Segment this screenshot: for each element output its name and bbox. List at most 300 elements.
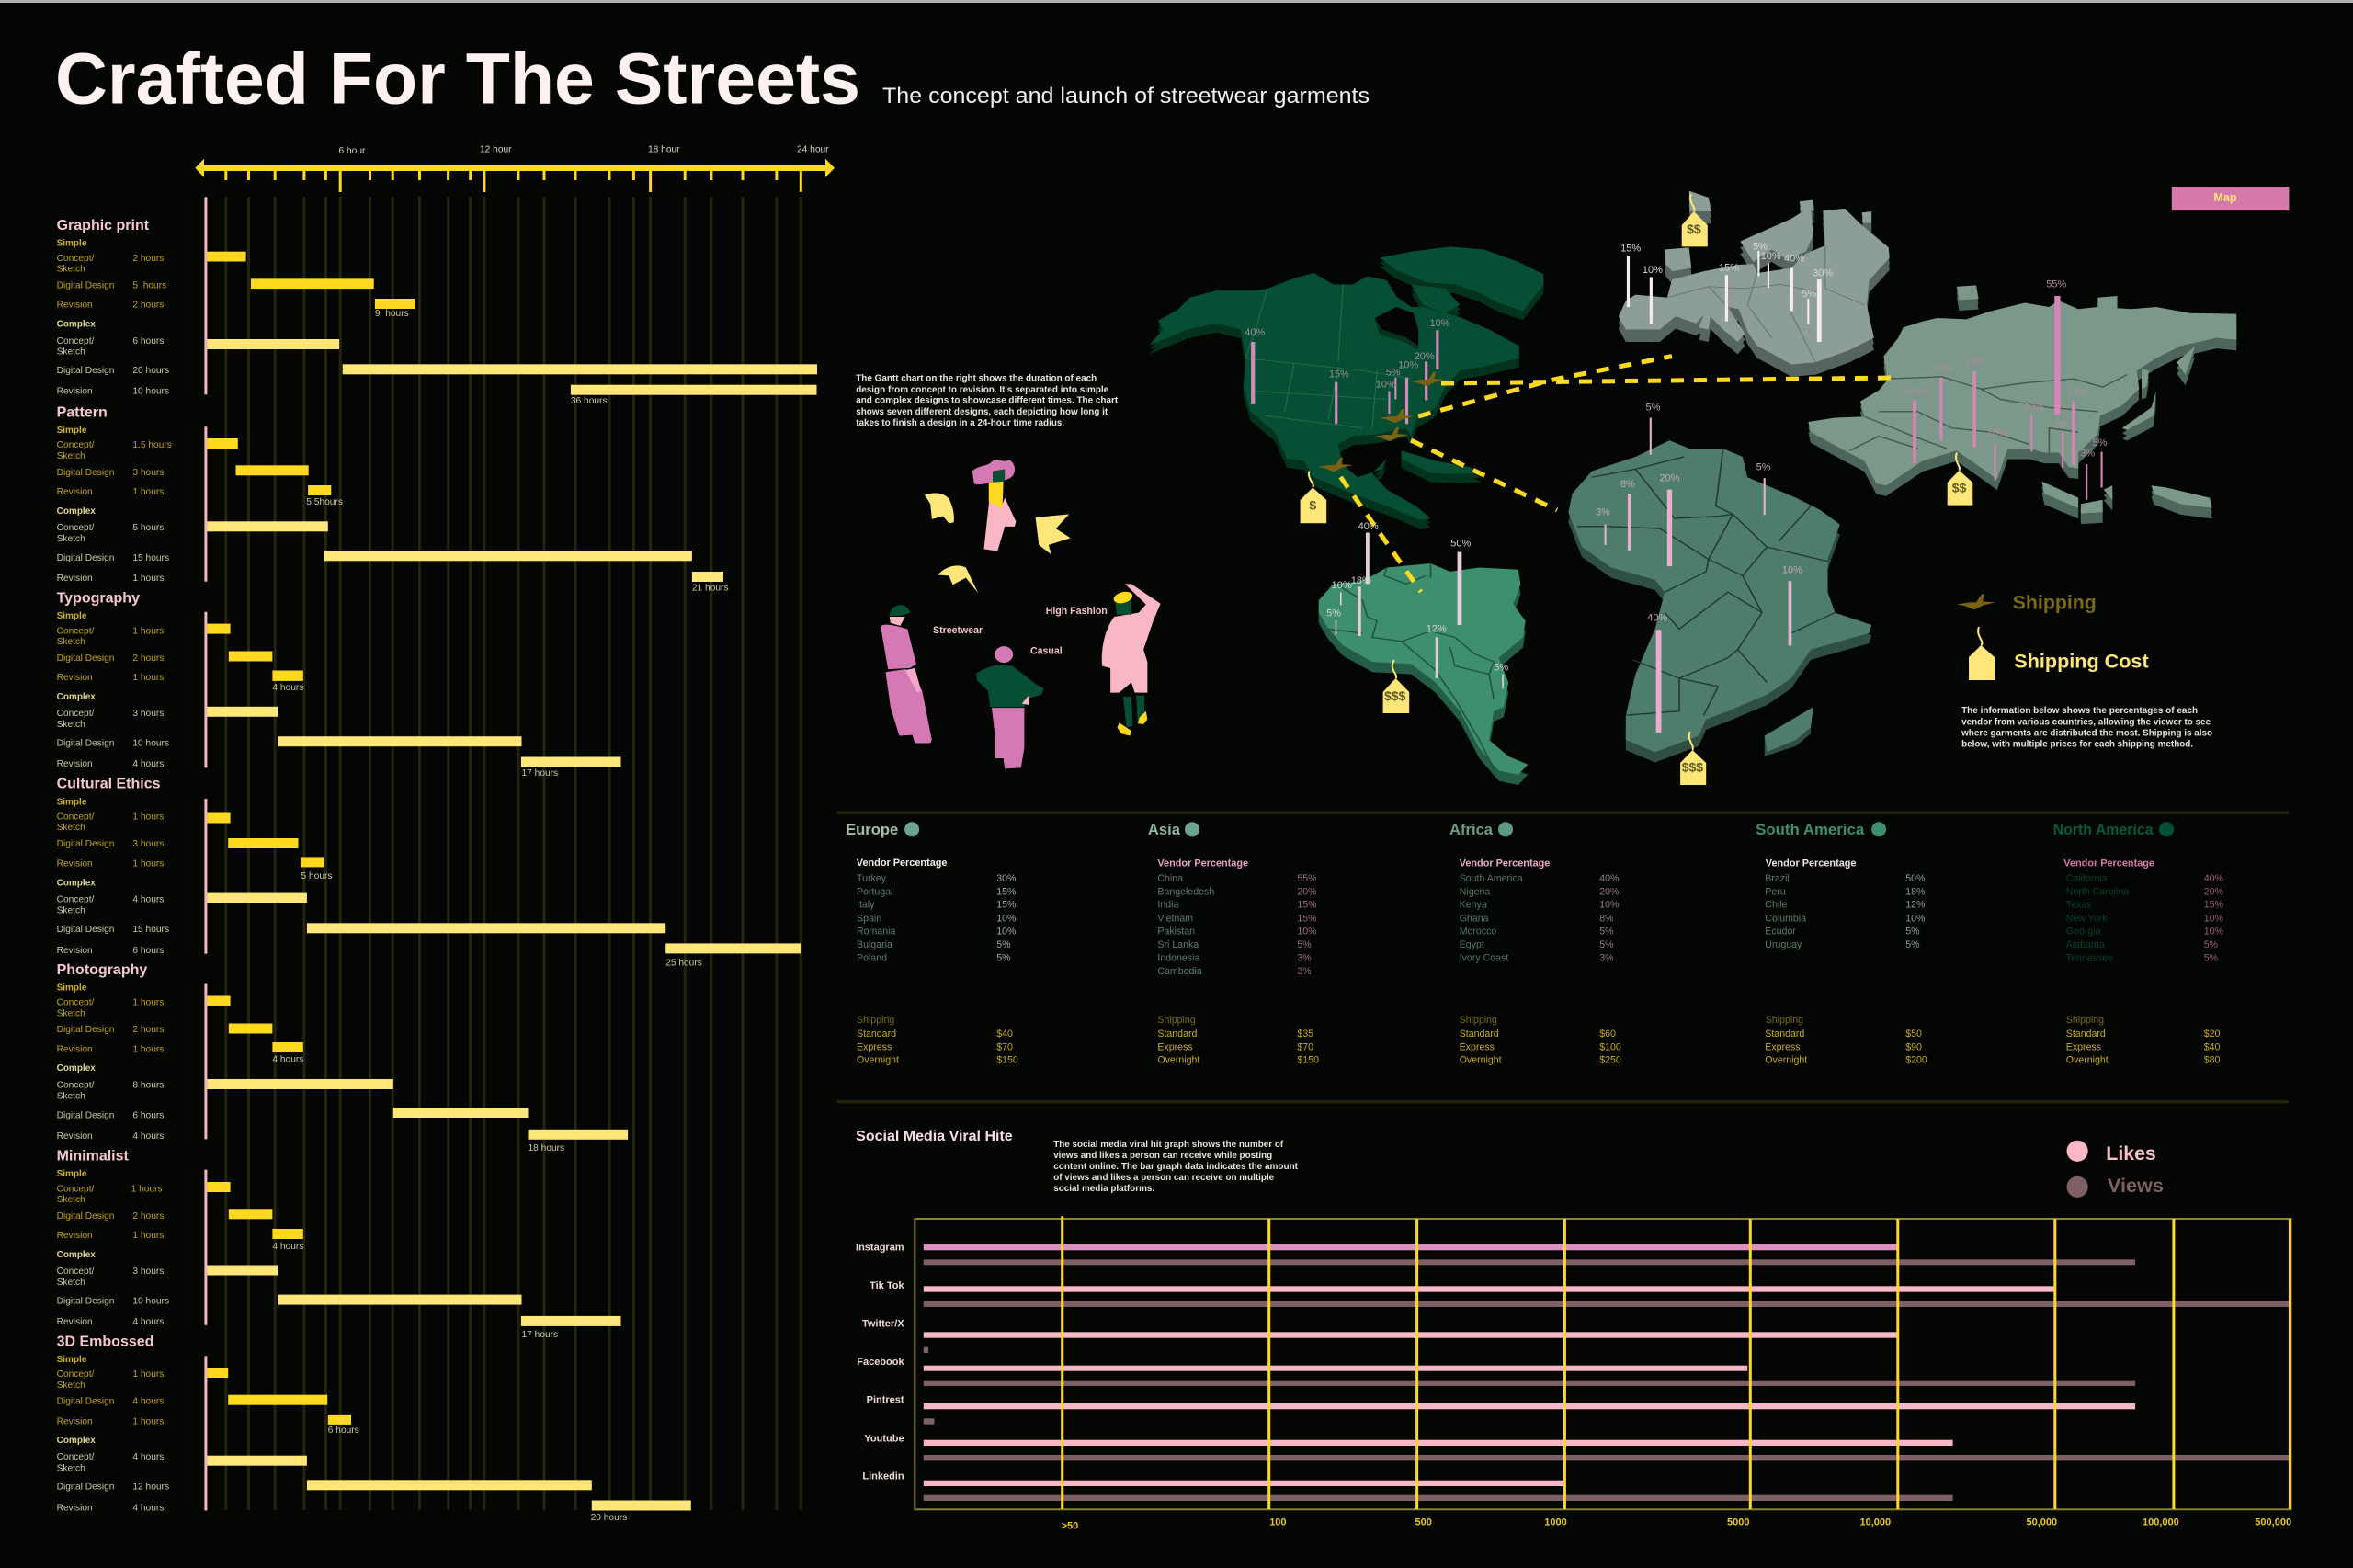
panel: Graphic print gantt: Digital Design (57, 281, 114, 290)
social media explanation text: social media platforms. (1053, 1184, 1154, 1194)
panel: Pattern gantt: 21 hours (692, 583, 729, 594)
panel: Typography gantt: Complex (57, 692, 96, 702)
social media explanation text: views and likes a person can receive while posting (1053, 1151, 1272, 1161)
panel: Photography gantt: Sketch (57, 1092, 85, 1101)
panel: Typography gantt: 1 hours (132, 673, 164, 683)
panel: Europe vendors: 10% (996, 926, 1017, 937)
panel: Pattern gantt: Digital Design (57, 553, 114, 563)
panel: Typography gantt: 1 hours (132, 626, 164, 636)
panel: South America vendors: Brazil (1765, 873, 1790, 884)
map: europe (1619, 191, 1890, 377)
panel: Europe vendors: 5% (996, 953, 1011, 964)
labels: north america percentages: 10% (1398, 359, 1418, 370)
labels: asia percentages: 40% (1987, 428, 2007, 439)
legend: shipping (1957, 591, 2097, 613)
panel: Minimalist gantt: Sketch (57, 1278, 85, 1288)
axis labels: 500 (1415, 1517, 1432, 1528)
price tag: Africa $$$ (1680, 732, 1706, 785)
panel: Cultural Ethics gantt: 6 hours (132, 946, 164, 956)
labels: asia percentages: 40% (1905, 386, 1926, 397)
section divider (837, 1100, 2289, 1103)
chart: south america vendor pins (1336, 533, 1504, 688)
panel: South America vendors: $90 (1905, 1041, 1922, 1052)
map: south america (1319, 533, 1528, 785)
price tag: Africa $$$: $$$ (1682, 759, 1703, 774)
panel: Minimalist gantt: Sketch (57, 1195, 85, 1205)
labels: asia percentages (1905, 279, 2108, 459)
panel: Asia vendors: Overnight (1157, 1055, 1199, 1066)
panel: Asia vendors: Vendor Percentage (1157, 858, 1248, 869)
panel: South America vendors: 18% (1905, 886, 1926, 897)
panel: Asia vendors: India (1157, 900, 1178, 911)
panel: South America vendors: Shipping (1766, 1015, 1803, 1026)
platform labels: Youtube (864, 1433, 904, 1444)
panel: Europe vendors: $40 (996, 1028, 1013, 1040)
labels: south america percentages: 18% (1351, 575, 1371, 586)
panel: Cultural Ethics gantt: 1 hours (132, 812, 164, 822)
panel: Cultural Ethics gantt: Concept/ (57, 894, 95, 904)
map explanation text: The information below shows the percentages of each (1961, 706, 2198, 716)
panel: Minimalist gantt: Complex (57, 1250, 96, 1260)
labels: europe percentages: 40% (1784, 253, 1804, 264)
platform labels: Pintrest (867, 1394, 904, 1405)
labels: europe percentages: 15% (1719, 263, 1739, 274)
panel: Asia vendors: 3% (1297, 966, 1312, 977)
panel: Pattern gantt: 1 hours (132, 574, 164, 584)
labels: asia percentages: 10% (1932, 363, 1952, 374)
panel: Minimalist gantt: 1 hours (132, 1231, 164, 1241)
panel: Cultural Ethics gantt: 1 hours (132, 858, 164, 869)
map explanation text: below, with multiple prices for each shipping method. (1961, 739, 2193, 750)
panel: Europe vendors: 15% (996, 900, 1017, 911)
panel: Asia vendors: 55% (1297, 873, 1317, 884)
panel: South America vendors: 10% (1905, 913, 1926, 924)
social media explanation text: The social media viral hit graph shows the number of (1053, 1140, 1284, 1150)
panel: Europe vendors: 15% (996, 886, 1017, 897)
panel: Europe vendors: Shipping (857, 1015, 894, 1026)
panel: Asia vendors: 10% (1297, 926, 1317, 937)
labels: asia percentages: 55% (2046, 279, 2067, 290)
panel: Photography gantt: 4 hours (272, 1055, 303, 1064)
platform labels: Twitter/X (862, 1318, 904, 1329)
panel: Photography gantt: 2 hours (132, 1025, 164, 1035)
map button (2172, 187, 2289, 210)
panel: Pattern gantt: 3 hours (132, 468, 164, 478)
labels: asia percentages: 3% (2053, 420, 2068, 431)
axis labels: 50,000 (2026, 1517, 2057, 1528)
panel: Typography gantt: 3 hours (132, 709, 164, 719)
map explanation text (1961, 706, 2212, 750)
labels: north america percentages: 40% (1245, 327, 1266, 338)
panel: Graphic print gantt: Simple (57, 239, 87, 248)
gantt timeline axis: 24 hour (797, 145, 829, 154)
panel: Africa vendors: 5% (1599, 939, 1614, 950)
panel: Minimalist gantt: 3 hours (132, 1267, 164, 1277)
labels: africa percentages: 40% (1647, 612, 1667, 623)
panel: South America vendors (1756, 821, 1927, 1066)
panel: Cultural Ethics gantt (57, 776, 801, 969)
panel: South America vendors: Standard (1765, 1028, 1804, 1040)
price tag: South America $$$: $$$ (1384, 688, 1406, 703)
panel: North America vendors: Shipping (2066, 1015, 2104, 1026)
panel: Cultural Ethics gantt: Sketch (57, 823, 85, 833)
panel: Europe vendors: Vendor Percentage (857, 858, 947, 869)
panel: Photography gantt: Concept/ (57, 998, 95, 1007)
panel: Africa vendors: Ivory Coast (1460, 953, 1508, 964)
panel: Pattern gantt (57, 404, 729, 594)
panel: Asia vendors: $35 (1297, 1028, 1313, 1040)
price tag: North America $ (1301, 472, 1326, 523)
panel: Africa vendors: Morocco (1460, 926, 1496, 937)
panel: Cultural Ethics gantt: 4 hours (132, 894, 164, 904)
panel: Asia vendors: Shipping (1157, 1015, 1196, 1026)
panel: Pattern gantt: 15 hours (132, 553, 169, 563)
panel: Europe vendors: Express (857, 1041, 892, 1052)
panel: Photography gantt: Simple (57, 983, 87, 993)
chart: europe vendor pins (1627, 251, 1822, 342)
price tag: Asia $$ (1948, 452, 1972, 506)
panel: 3D Embossed gantt: Digital Design (57, 1397, 114, 1407)
gantt explanation text: takes to finish a design in a 24-hour time radius. (856, 418, 1064, 428)
panel: North America vendors: 40% (2204, 873, 2223, 884)
panel: Africa vendors: South America (1460, 873, 1523, 884)
panel: Photography gantt: Complex (57, 1063, 96, 1074)
panel: North America vendors: North America (2053, 821, 2154, 838)
panel: Europe vendors (846, 821, 1018, 1066)
panel: Typography gantt: 17 hours (522, 768, 558, 778)
panel: Minimalist gantt: 1 hours (131, 1184, 163, 1194)
panel: North America vendors: North Carolina (2066, 886, 2129, 897)
panel: Cultural Ethics gantt: 3 hours (132, 839, 164, 849)
panel: Pattern gantt: Revision (57, 487, 93, 497)
panel: 3D Embossed gantt: 3D Embossed (57, 1335, 153, 1349)
gantt timeline axis (195, 145, 835, 192)
labels: asia percentages: 3% (2080, 448, 2095, 459)
panel: 3D Embossed gantt: 4 hours (132, 1397, 164, 1407)
panel: 3D Embossed gantt: 20 hours (591, 1513, 627, 1523)
panel: Asia vendors: $70 (1297, 1041, 1313, 1052)
panel: Cultural Ethics gantt: Revision (57, 858, 93, 869)
panel: Africa vendors (1449, 821, 1621, 1066)
panel: Photography gantt: Digital Design (57, 1110, 114, 1120)
panel: 3D Embossed gantt: Concept/ (57, 1452, 95, 1462)
panel: Asia vendors: 5% (1297, 939, 1312, 950)
figure: streetwear (881, 605, 932, 744)
panel: Graphic print gantt (57, 197, 817, 406)
labels: europe percentages (1620, 241, 1833, 300)
panel: North America vendors: $80 (2204, 1055, 2220, 1066)
panel: Asia vendors: Bangeledesh (1157, 886, 1214, 897)
panel: North America vendors: 15% (2204, 900, 2223, 911)
panel: Africa vendors: Standard (1460, 1028, 1499, 1040)
panel: Typography gantt: Digital Design (57, 739, 114, 748)
labels: south america percentages: 40% (1358, 521, 1379, 532)
panel: Graphic print gantt: 6 hours (132, 336, 164, 347)
labels: south america percentages: 5% (1494, 662, 1508, 673)
panel: Africa vendors: 20% (1599, 886, 1620, 897)
panel: North America vendors: Standard (2066, 1028, 2106, 1040)
panel: South America vendors: $50 (1905, 1028, 1922, 1040)
panel: Typography gantt: Simple (57, 611, 87, 621)
figure: casual (976, 646, 1044, 768)
panel: Typography gantt: Revision (57, 759, 93, 769)
platform labels: Linkedin (862, 1471, 904, 1483)
icon: yellow boomerang shard (938, 565, 978, 593)
labels: asia percentages: 20% (2023, 402, 2044, 413)
panel: South America vendors: 5% (1905, 939, 1920, 950)
platform labels (856, 1243, 904, 1483)
panel: 3D Embossed gantt: 12 hours (132, 1483, 169, 1493)
panel: North America vendors: Express (2066, 1041, 2101, 1052)
panel: Asia vendors: 15% (1297, 913, 1317, 924)
panel: North America vendors: 20% (2204, 886, 2223, 897)
bars: views (924, 1259, 2290, 1501)
section divider (837, 811, 2289, 814)
gantt timeline axis: 6 hour (338, 146, 366, 156)
panel: Typography gantt: 4 hours (272, 683, 303, 693)
panel: Europe vendors: Bulgaria (857, 939, 892, 950)
axis labels: >50 (1062, 1520, 1078, 1531)
panel: Europe vendors: Romania (857, 926, 896, 937)
panel: Europe vendors: 5% (996, 939, 1011, 950)
panel: Photography gantt: 6 hours (132, 1110, 164, 1120)
panel: Africa vendors: $250 (1599, 1055, 1621, 1066)
panel: Pattern gantt: 5 hours (132, 523, 164, 533)
panel: Typography gantt: 4 hours (132, 759, 164, 769)
gantt explanation text: and complex designs to showcase different times. The chart (856, 396, 1119, 406)
price tag: South America $$$ (1383, 660, 1409, 713)
panel: Minimalist gantt: 4 hours (132, 1317, 164, 1327)
gantt explanation text (856, 373, 1119, 428)
legend: shipping cost: Shipping Cost (2014, 649, 2149, 672)
labels: europe percentages: 15% (1620, 244, 1641, 255)
panel: Graphic print gantt: 2 hours (132, 254, 164, 264)
panel: North America vendors: 10% (2204, 913, 2223, 924)
panel: Cultural Ethics gantt: Cultural Ethics (57, 776, 161, 792)
panel: Africa vendors: Express (1460, 1041, 1495, 1052)
labels: south america percentages: 10% (1332, 580, 1352, 591)
legend: views (2066, 1175, 2164, 1198)
panel: Pattern gantt: Concept/ (57, 440, 95, 450)
panel: Pattern gantt: 5.5hours (306, 497, 343, 507)
legend: shipping cost (1969, 627, 2149, 680)
labels: europe percentages: 30% (1813, 267, 1833, 278)
panel: Typography gantt: Sketch (57, 720, 85, 730)
labels: south america percentages (1326, 521, 1508, 673)
panel: Cultural Ethics gantt: 5 hours (301, 871, 332, 881)
gantt grid lines (226, 197, 801, 1510)
panel: Pattern gantt: Sketch (57, 534, 85, 544)
legend: likes: Likes (2106, 1142, 2156, 1165)
labels: north america percentages (1245, 318, 1450, 390)
panel: Minimalist gantt: 10 hours (132, 1296, 169, 1307)
figure: photographer top (972, 460, 1016, 551)
panel: Africa vendors: Ghana (1460, 913, 1489, 924)
labels: asia percentages: 15% (2067, 386, 2087, 397)
panel: Africa vendors: Overnight (1460, 1055, 1502, 1066)
panel: Graphic print gantt: Complex (57, 320, 96, 329)
panel: North America vendors: Alabama (2066, 939, 2105, 950)
panel: Asia vendors: Asia (1148, 821, 1181, 838)
shipping routes: dashed lines (1340, 357, 1893, 592)
panel: Europe vendors: Standard (857, 1028, 896, 1040)
price tag: North America $: $ (1309, 498, 1316, 513)
panel: North America vendors: Overnight (2066, 1055, 2109, 1066)
map: asia (1808, 285, 2236, 524)
axis labels: 500,000 (2255, 1517, 2291, 1528)
panel: Asia vendors (1148, 821, 1319, 1066)
panel: Photography gantt: 1 hours (132, 998, 164, 1007)
panel: 3D Embossed gantt: Simple (57, 1355, 87, 1365)
panel: Pattern gantt: Sketch (57, 451, 85, 461)
map button: Map (2213, 191, 2237, 204)
panel: Graphic print gantt: Sketch (57, 347, 85, 357)
panel: North America vendors: $20 (2204, 1028, 2220, 1040)
platform labels: Tik Tok (870, 1280, 904, 1291)
panel: Typography gantt: Typography (57, 590, 140, 607)
panel: Europe vendors: Poland (857, 953, 887, 964)
axis labels (1062, 1517, 2291, 1531)
axis labels: 1000 (1544, 1517, 1567, 1528)
panel: Asia vendors: Indonesia (1157, 953, 1199, 964)
panel: 3D Embossed gantt: 1 hours (132, 1369, 164, 1380)
panel: Cultural Ethics gantt: 15 hours (132, 925, 169, 935)
gantt explanation text: The Gantt chart on the right shows the duration of each (856, 373, 1097, 384)
labels: africa percentages: 20% (1659, 473, 1680, 484)
panel: 3D Embossed gantt: 4 hours (132, 1503, 164, 1513)
social media explanation text: content online. The bar graph data indicates the amount (1053, 1162, 1299, 1172)
legend: shipping: Shipping (2013, 591, 2097, 613)
labels: south america percentages: 50% (1450, 539, 1472, 550)
panel: Photography gantt: Revision (57, 1044, 93, 1055)
panel: Pattern gantt: 1 hours (132, 487, 164, 497)
panel: North America vendors: $40 (2204, 1041, 2220, 1052)
panel: Graphic print gantt: Graphic print (57, 218, 150, 233)
panel: North America vendors: 5% (2204, 953, 2219, 964)
panel: Europe vendors: Spain (857, 913, 881, 924)
price tag: Asia $$: $$ (1952, 480, 1966, 494)
panel: Typography gantt (57, 590, 621, 778)
panel: Asia vendors: Vietnam (1157, 913, 1193, 924)
title: Crafted For The Streets (55, 38, 860, 119)
panel: North America vendors: Tennessee (2066, 953, 2113, 964)
legend: views: Views (2108, 1175, 2164, 1197)
panel: Typography gantt: 10 hours (132, 739, 169, 748)
panel: Europe vendors: $150 (996, 1055, 1018, 1066)
map explanation text: vendor from various countries, allowing the viewer to see (1961, 717, 2211, 727)
chart: asia vendor pins (1913, 296, 2103, 500)
labels: south america percentages: 12% (1427, 623, 1447, 634)
panel: Minimalist gantt: Concept/ (57, 1184, 95, 1194)
panel: North America vendors: Georgia (2066, 926, 2101, 937)
labels: africa percentages: 10% (1782, 564, 1802, 575)
panel: Minimalist gantt: Revision (57, 1231, 93, 1241)
panel: Africa vendors: Nigeria (1460, 886, 1490, 897)
panel: Europe vendors: Portugal (857, 886, 892, 897)
panel: North America vendors: 10% (2204, 926, 2223, 937)
panel: Minimalist gantt: Digital Design (57, 1211, 114, 1221)
panel: Pattern gantt: Complex (57, 506, 96, 517)
panel: Africa vendors: 5% (1599, 926, 1614, 937)
panel: Europe vendors: Overnight (857, 1055, 899, 1066)
panel: Cultural Ethics gantt: 25 hours (665, 958, 702, 969)
panel: 3D Embossed gantt: Revision (57, 1503, 93, 1513)
icon: yellow flag shard (1036, 514, 1071, 554)
panel: Minimalist gantt: Revision (57, 1317, 93, 1327)
social media explanation text (1053, 1140, 1299, 1194)
labels: south america percentages: 5% (1326, 608, 1341, 619)
panel: Graphic print gantt: Digital Design (57, 366, 114, 376)
panel: Minimalist gantt: Digital Design (57, 1296, 114, 1307)
panel: Minimalist gantt: Simple (57, 1169, 87, 1179)
panel: Africa vendors: Shipping (1460, 1015, 1497, 1026)
subtitle: The concept and launch of streetwear garments (882, 84, 1370, 108)
labels: africa percentages: 8% (1620, 479, 1635, 490)
panel: Cultural Ethics gantt: Complex (57, 879, 96, 888)
panel: Asia vendors: 20% (1297, 886, 1317, 897)
panel: Minimalist gantt: Concept/ (57, 1267, 95, 1277)
labels: europe percentages: 5% (1802, 289, 1817, 300)
panel: Cultural Ethics gantt: Simple (57, 798, 87, 807)
labels: africa percentages: 5% (1646, 402, 1661, 413)
gantt timeline axis: 18 hour (648, 145, 680, 154)
panel: Asia vendors: Pakistan (1157, 926, 1195, 937)
panel: Photography gantt: Sketch (57, 1008, 85, 1018)
panel: South America vendors: Express (1765, 1041, 1801, 1052)
panel: Minimalist gantt: Minimalist (57, 1148, 130, 1164)
panel: Asia vendors: Express (1157, 1041, 1193, 1052)
panel: South America vendors: Overnight (1765, 1055, 1807, 1066)
map: africa (1568, 418, 1871, 763)
panel: Minimalist gantt (57, 1148, 621, 1340)
chart: africa vendor pins (1605, 418, 1791, 733)
panel: Photography gantt: Revision (57, 1131, 93, 1142)
panel: South America vendors: South America (1756, 821, 1865, 838)
panel: South America vendors: Chile (1765, 900, 1788, 911)
gantt timeline axis: 12 hour (480, 145, 512, 154)
panel: 3D Embossed gantt: Revision (57, 1416, 93, 1426)
icons: shipping planes (1318, 372, 1446, 472)
panel: Pattern gantt: Simple (57, 426, 87, 436)
illustration: fashion figures (881, 460, 1161, 768)
panel: Graphic print gantt: Concept/ (57, 336, 95, 347)
panel: North America vendors: California (2066, 873, 2108, 884)
panel: Cultural Ethics gantt: Digital Design (57, 839, 114, 849)
panel: Typography gantt: Digital Design (57, 653, 114, 664)
panel: South America vendors: Peru (1765, 886, 1786, 897)
bars: likes (924, 1244, 2135, 1486)
legend: likes (2066, 1141, 2156, 1165)
chart: north america vendor pins (1251, 330, 1438, 424)
panel: South America vendors: 12% (1905, 900, 1926, 911)
labels: north america percentages: 20% (1415, 351, 1435, 362)
gantt explanation text: shows seven different designs, each depicting how long it (856, 407, 1108, 417)
panel: 3D Embossed gantt (57, 1335, 691, 1523)
panel: Photography gantt: 18 hours (528, 1143, 564, 1153)
panel: Europe vendors: Europe (846, 821, 898, 838)
panel: Photography gantt: Photography (57, 962, 147, 978)
labels: africa percentages: 3% (1596, 507, 1610, 518)
labels: asia percentages: 15% (1964, 356, 1984, 367)
panel: Graphic print gantt: Revision (57, 386, 93, 397)
axis labels: 100,000 (2143, 1517, 2179, 1528)
panel: Graphic print gantt: 10 hours (132, 386, 169, 397)
panel: Graphic print gantt: Revision (57, 300, 93, 311)
panel: 3D Embossed gantt: Sketch (57, 1463, 85, 1474)
panel: Africa vendors: 40% (1599, 873, 1620, 884)
panel: Graphic print gantt: 5 hours (132, 281, 166, 290)
panel: Typography gantt: Revision (57, 673, 93, 683)
